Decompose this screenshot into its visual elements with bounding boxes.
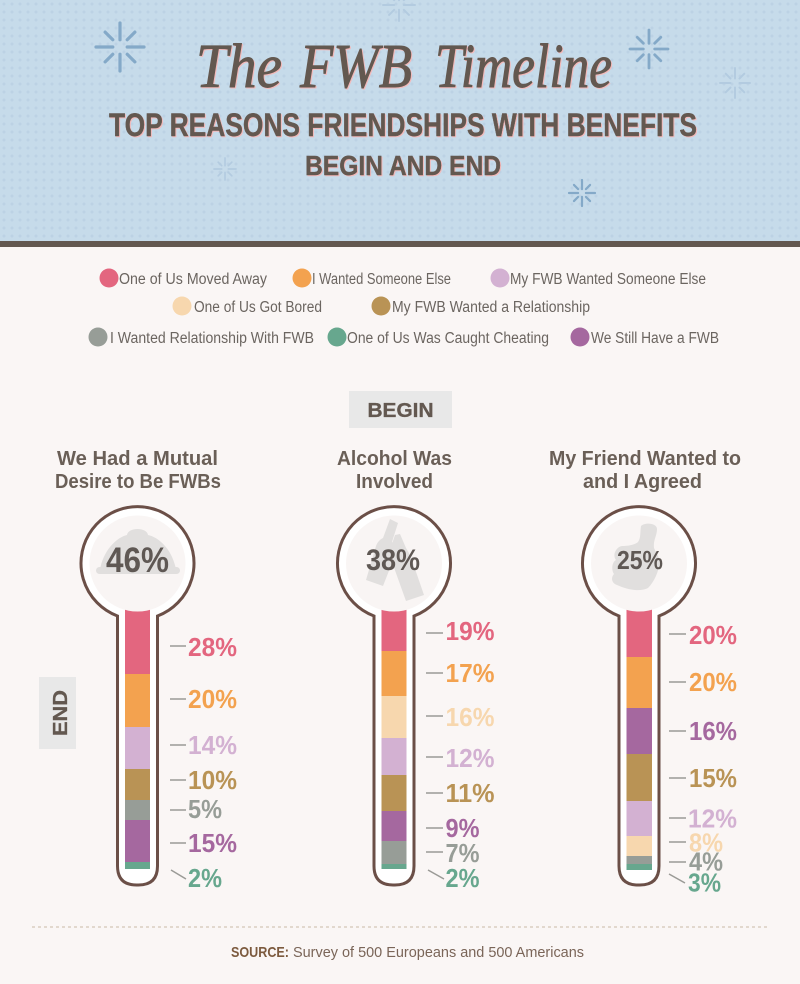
percent labels: mutual desire: 2% [188, 865, 222, 893]
legend: My FWB Wanted a Relationship [392, 299, 590, 316]
title: The [196, 33, 282, 101]
thermometer: alcohol: 38% [366, 544, 420, 577]
legend: One of Us Moved Away [119, 271, 267, 288]
thermometer: friend wanted: 25% [617, 545, 663, 575]
heading: alcohol [337, 448, 452, 493]
thermometer: mutual desire [81, 507, 194, 885]
percent labels: mutual desire: 15% [188, 830, 237, 858]
percent labels: mutual desire: 28% [188, 634, 237, 662]
icon: thumbs up [612, 524, 660, 590]
legend: I Wanted Relationship With FWB [110, 330, 314, 347]
percent labels: alcohol: 9% [446, 815, 480, 843]
heading: friend wanted [549, 448, 741, 493]
percent labels: alcohol: 7% [446, 840, 480, 868]
percent labels: mutual desire: 5% [188, 796, 222, 824]
percent labels: mutual desire [170, 634, 237, 893]
percent labels: alcohol: 16% [446, 704, 494, 732]
heading: friend wanted: My Friend Wanted to [549, 448, 741, 470]
percent labels: alcohol: 17% [446, 660, 494, 688]
legend: My FWB Wanted Someone Else [510, 271, 706, 288]
percent labels: friend wanted: 20% [689, 622, 737, 650]
thermometer: mutual desire: 46% [106, 541, 169, 580]
percent labels: friend wanted: 12% [688, 806, 737, 834]
icon: serving cloche [96, 529, 180, 574]
end label: END [50, 690, 72, 736]
percent labels: friend wanted: 20% [689, 669, 737, 697]
thermometer: friend wanted [582, 507, 696, 885]
icon: clinking bottles [366, 519, 424, 601]
icon: sparkles [96, 0, 750, 206]
title [196, 33, 612, 101]
legend: We Still Have a FWB [591, 330, 719, 347]
percent labels: friend wanted: 3% [688, 870, 721, 898]
heading: mutual desire: Desire to Be FWBs [55, 471, 221, 493]
legend: I Wanted Someone Else [312, 271, 451, 288]
begin label: BEGIN [368, 400, 434, 422]
percent labels: alcohol: 19% [446, 618, 494, 646]
percent labels: friend wanted: 16% [689, 718, 737, 746]
heading: mutual desire: We Had a Mutual [57, 448, 218, 470]
percent labels: alcohol [426, 618, 494, 893]
percent labels: mutual desire: 14% [188, 732, 237, 760]
thermometer: alcohol [338, 507, 451, 885]
legend: One of Us Was Caught Cheating [347, 330, 549, 347]
subtitle line two: BEGIN AND END [305, 150, 501, 181]
percent labels: alcohol: 11% [446, 780, 494, 808]
percent labels: friend wanted: 4% [689, 848, 723, 876]
end label [39, 677, 76, 749]
source: Survey of 500 Europeans and 500 Americans [293, 944, 584, 961]
title: Timeline [435, 33, 612, 101]
percent labels: alcohol: 12% [446, 745, 494, 773]
legend [88, 268, 719, 347]
percent labels: friend wanted: 15% [689, 765, 737, 793]
legend: One of Us Got Bored [194, 299, 322, 316]
percent labels: mutual desire: 20% [188, 686, 237, 714]
source: SOURCE: [231, 944, 289, 961]
header banner [0, 0, 800, 247]
heading: mutual desire [55, 448, 221, 493]
heading: alcohol: Involved [356, 471, 433, 493]
begin label [349, 391, 452, 428]
percent labels: friend wanted [669, 622, 737, 898]
heading: alcohol: Alcohol Was [337, 448, 452, 470]
title: FWB [299, 33, 412, 101]
percent labels: friend wanted: 8% [689, 830, 723, 858]
heading: friend wanted: and I Agreed [583, 471, 702, 493]
percent labels: mutual desire: 10% [188, 767, 237, 795]
percent labels: alcohol: 2% [446, 865, 480, 893]
